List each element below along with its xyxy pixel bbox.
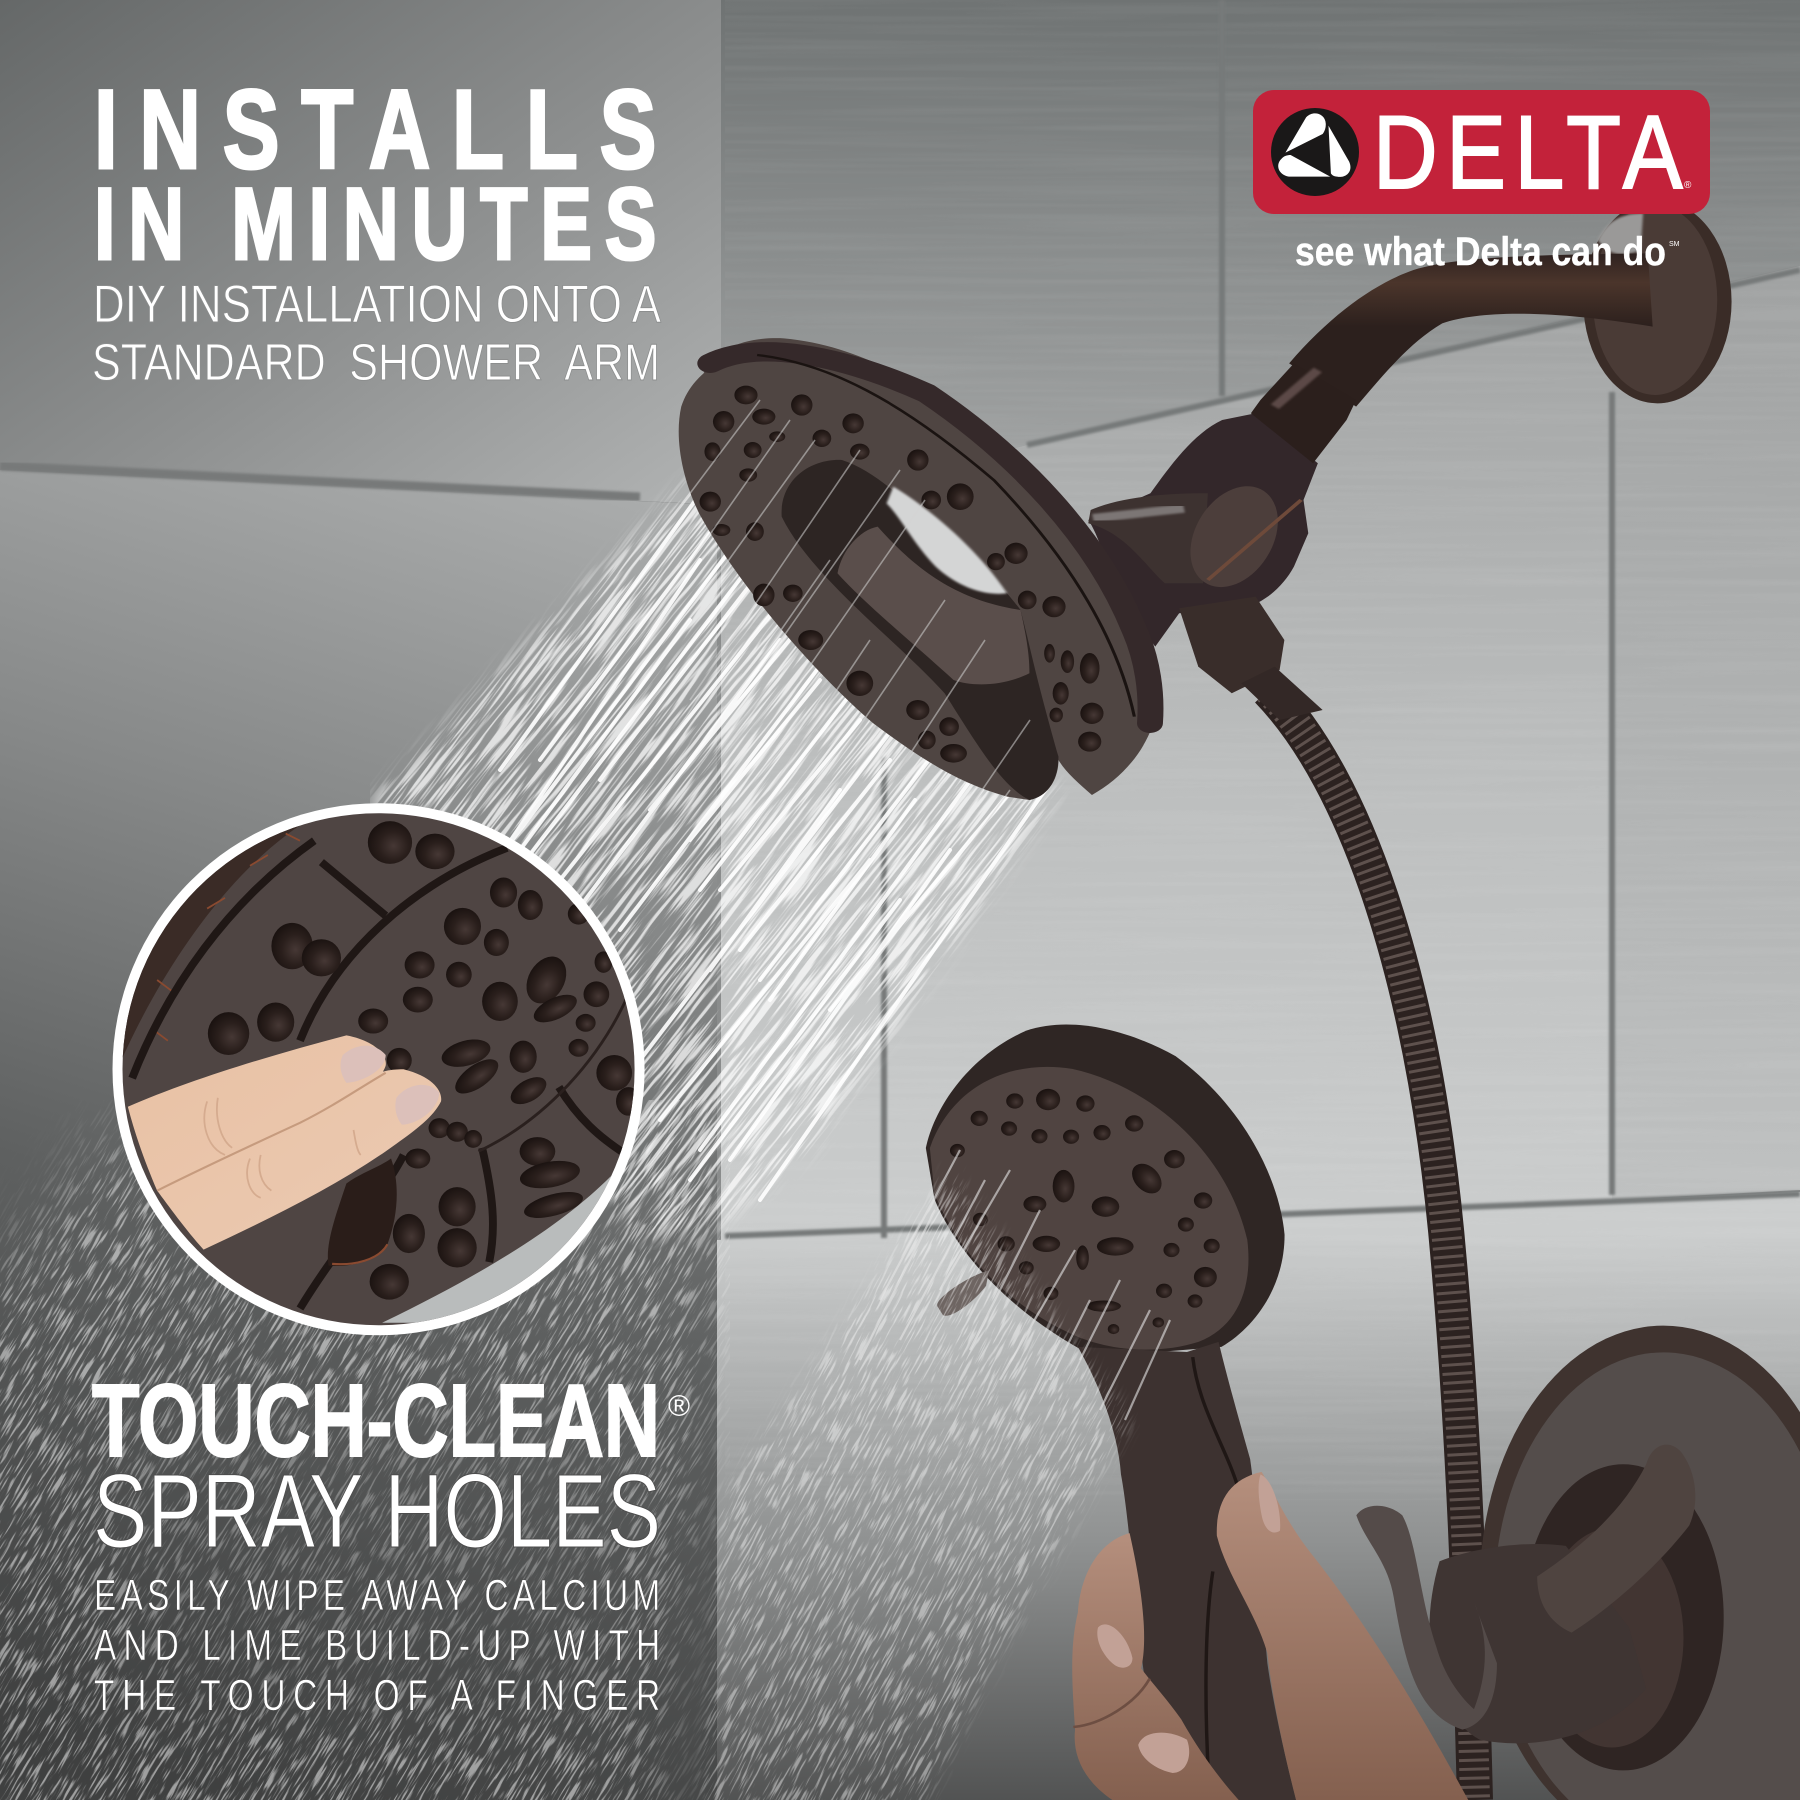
hand shower nozzles: [950, 1089, 1220, 1334]
description line 2: AND LIME BUILD-UP WITH: [94, 1622, 660, 1670]
spray nozzles: [700, 386, 1104, 763]
handle seam: [1193, 1357, 1239, 1800]
threaded nut: [1251, 363, 1356, 463]
heading: touch-clean spray holes: [92, 1363, 690, 1720]
wall flange: [1583, 200, 1732, 403]
inset nozzles: [208, 821, 641, 1300]
hand shower assembly: [926, 1025, 1800, 1800]
subhead line 1: DIY INSTALLATION ONTO A: [93, 275, 662, 334]
copper edge: [1208, 500, 1301, 580]
registered mark: ®: [668, 1390, 690, 1423]
copper streaks: [154, 834, 300, 1041]
hand shower head rim: [926, 1025, 1285, 1357]
mount cylinder: [1088, 493, 1208, 583]
inset white ring: [112, 803, 645, 1335]
headline line 2: IN MINUTES: [94, 168, 656, 282]
water from hand shower: [690, 1150, 1170, 1800]
fingers: [1072, 1533, 1239, 1800]
tagline: see what Delta can do: [1295, 230, 1666, 274]
overhead shower head: [679, 338, 1157, 800]
hand spray noise: [690, 1160, 1140, 1800]
wordmark: DELTA: [1373, 94, 1683, 211]
inset fingers: [128, 1035, 441, 1250]
mode selector tab: [937, 1270, 989, 1316]
description line 1: EASILY WIPE AWAY CALCIUM: [94, 1572, 660, 1620]
flange face: [1593, 205, 1717, 395]
hose collar: [1241, 667, 1323, 720]
subhead line 2: STANDARD SHOWER ARM: [92, 334, 660, 392]
valve recess: [1523, 1464, 1724, 1770]
inset grooves: [132, 841, 621, 1309]
cylinder highlight: [1093, 508, 1184, 518]
service mark: SM: [1669, 241, 1680, 248]
plate face: [1494, 1352, 1800, 1800]
feature subtitle: SPRAY HOLES: [93, 1453, 661, 1570]
finger crease: [1073, 1679, 1150, 1727]
mount disc: [1176, 479, 1293, 594]
hand shower handle: [1078, 1342, 1296, 1800]
inner panel edge: [479, 994, 629, 1151]
lever copper edge: [332, 1244, 387, 1264]
logo: Delta: [1253, 90, 1710, 274]
shower valve plate: [1480, 1326, 1800, 1800]
hand spray lines: [860, 1150, 1170, 1420]
inset lower right gap: [382, 1176, 611, 1323]
hose connector: [1179, 597, 1284, 693]
flange highlight: [1598, 213, 1643, 254]
inset lever: [328, 1159, 397, 1266]
curved arm: [1289, 253, 1653, 407]
description line 3: THE TOUCH OF A FINGER: [94, 1672, 660, 1720]
swivel body: [1088, 413, 1318, 647]
hose: flexible metal hose: [1268, 690, 1475, 1800]
stream noise streaks: [370, 460, 1070, 1250]
head body: [679, 338, 1157, 800]
heading: installs in minutes: [92, 68, 662, 392]
registered mark: ®: [1684, 180, 1692, 191]
knuckle wrinkles: [204, 1098, 361, 1198]
thin water lines leaving the nozzles: [640, 400, 1030, 910]
headline line 1: INSTALLS: [94, 68, 656, 193]
rim groove: [757, 355, 1134, 717]
finger crease: [157, 1073, 386, 1191]
inset background: [122, 813, 635, 1326]
handle hub: [1429, 1544, 1646, 1743]
inner cylinder wall: [837, 527, 1029, 684]
left lever: [1356, 1506, 1497, 1730]
thumbnail: [1259, 1474, 1280, 1533]
thumb and wrist: [1217, 1472, 1468, 1800]
bright hole: [887, 487, 1007, 594]
right lever: [1537, 1445, 1695, 1633]
red badge: [1253, 90, 1710, 214]
inset content: [122, 813, 635, 1326]
water stream from overhead head: [370, 460, 1070, 1250]
arm: shower arm, flange and swivel mount: [1088, 200, 1732, 720]
fingernails: [1097, 1624, 1189, 1773]
feature title: TOUCH-CLEAN: [92, 1363, 660, 1478]
inset outer rim: [122, 826, 300, 1058]
nut highlight: [1275, 370, 1318, 407]
inset circle: finger wiping spray holes: [100, 780, 660, 1340]
spray: mist and water streaks at lower left: [0, 1100, 730, 1800]
valve inner disc: [1540, 1528, 1684, 1747]
inset nails: [340, 1046, 439, 1125]
head rim: [710, 352, 1151, 723]
hand shower face: [930, 1067, 1248, 1350]
center opening: [782, 460, 1058, 800]
stream bright lines: [400, 480, 1045, 1200]
triangle emblem: [1271, 108, 1359, 196]
